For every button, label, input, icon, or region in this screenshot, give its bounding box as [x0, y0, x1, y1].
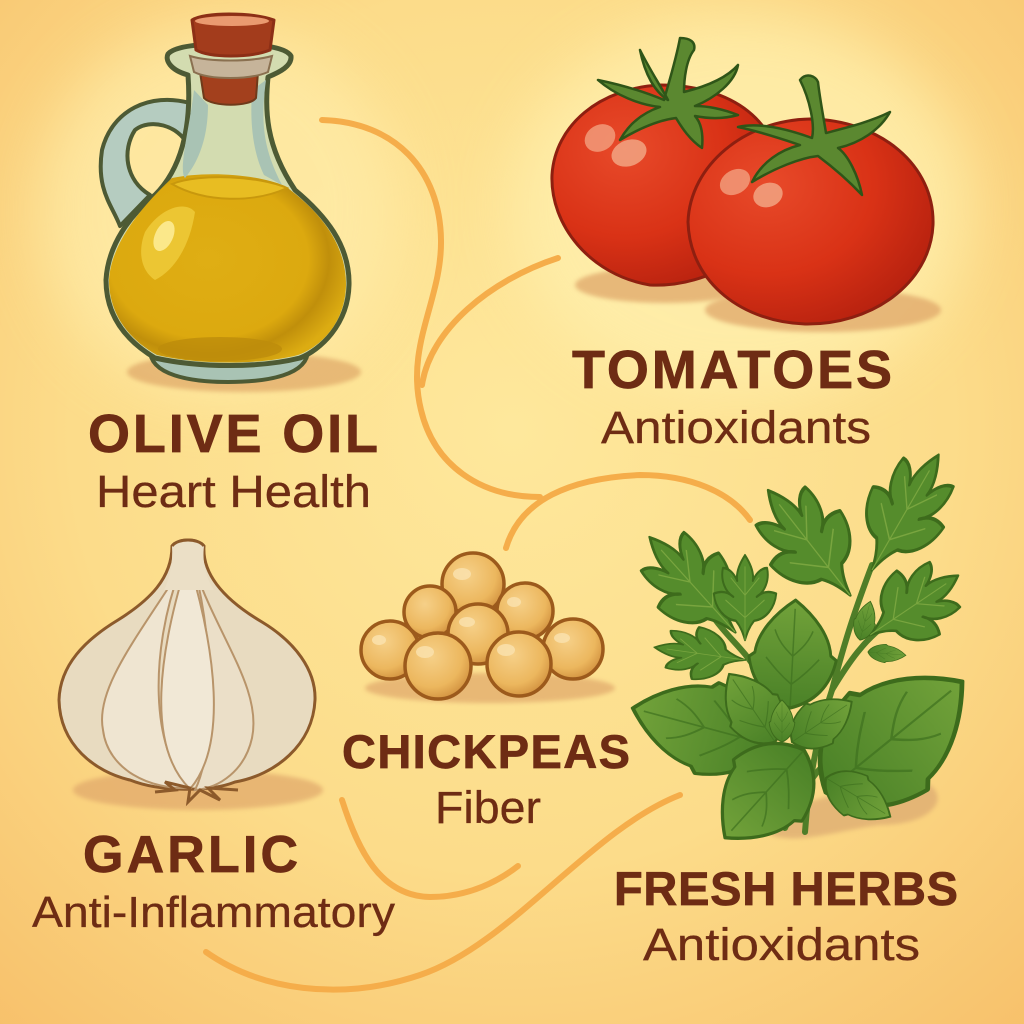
glass highlights [183, 90, 208, 178]
bottle handle [101, 100, 190, 226]
illustration: olive oil bottle [101, 14, 361, 392]
oil bottom shading [158, 337, 282, 361]
heading: garlic: GARLIC [83, 826, 298, 884]
heading: olive oil: OLIVE OIL [88, 404, 378, 464]
chickpea shadow [365, 673, 615, 703]
tomato shadows [575, 267, 755, 303]
herb shadow [770, 782, 938, 838]
oil surface [172, 177, 287, 199]
tomato right [688, 119, 933, 324]
bottle shadow [127, 352, 361, 392]
connector curves [206, 120, 750, 990]
heading: tomatoes: TOMATOES [572, 340, 892, 400]
bottle glass [106, 44, 349, 366]
bottle foot [150, 350, 308, 382]
cork top [192, 14, 274, 56]
bottle collar [190, 56, 272, 78]
illustration: tomatoes [552, 38, 941, 332]
illustration: fresh herbs [620, 435, 1001, 868]
cork lower [200, 72, 258, 105]
garlic cloves [102, 565, 254, 790]
heading: fresh herbs: FRESH HERBS [614, 862, 958, 915]
label: anti-inflammatory: Anti-Inflammatory [32, 888, 395, 937]
garlic roots [155, 782, 238, 802]
oil [109, 174, 346, 362]
herb stems [712, 565, 885, 832]
oil highlight [141, 206, 195, 280]
illustration: chickpeas [361, 553, 615, 703]
label: fiber: Fiber [435, 782, 541, 833]
heading: chickpeas: CHICKPEAS [342, 725, 630, 778]
illustration: garlic [59, 540, 323, 810]
label: heart health: Heart Health [96, 466, 371, 517]
garlic bulb [59, 540, 315, 789]
garlic shadow [73, 770, 323, 810]
label: antioxidants: Antioxidants [643, 919, 920, 970]
background glow: olive oil [40, 25, 400, 395]
label: antioxidants: Antioxidants [601, 402, 871, 453]
chickpea highlights [372, 568, 570, 658]
tomato stems [598, 38, 890, 195]
garlic neck [164, 540, 214, 590]
tomato left [552, 85, 780, 285]
background glow: tomatoes [510, 15, 970, 395]
